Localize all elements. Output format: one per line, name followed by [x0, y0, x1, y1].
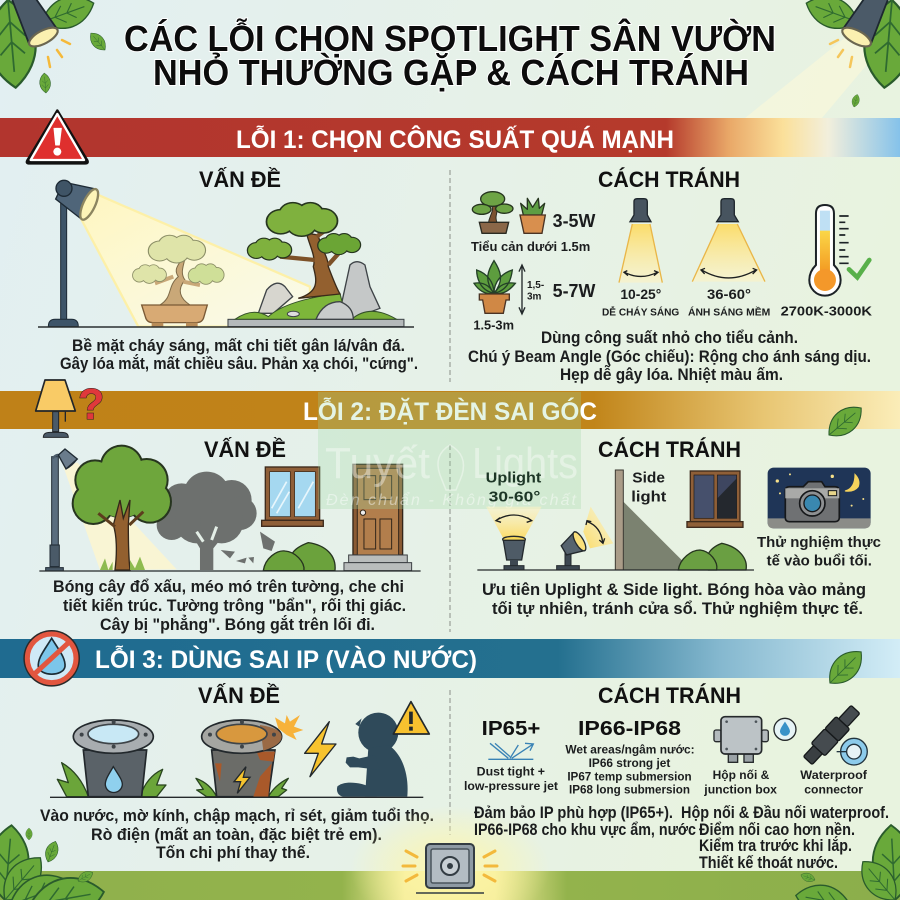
text: cach tranh 1: Chú ý Beam Angle (Góc chiếu): Rộng cho ánh sáng dịu. [468, 348, 871, 366]
text: junction box label: Hộp nối & [713, 768, 770, 782]
text: cach tranh 3: Thiết kế thoát nước. [699, 854, 838, 872]
text: height label: 1,5- [527, 280, 544, 291]
text: color temperature: 2700K-3000K [781, 303, 872, 318]
text: test at night: Thử nghiệm thực [757, 535, 881, 551]
icon: table lamp with question mark [36, 380, 104, 437]
text: van de 2: Bóng cây đổ xấu, méo mó trên tường, che chi [53, 578, 404, 596]
illustration: bad tree shadow [39, 445, 421, 571]
bottom left leaves [0, 824, 107, 900]
washed out bonsai in pot [133, 236, 224, 327]
text: test at night: tế vào buổi tối. [767, 553, 872, 569]
icon: bottom safe with glow [350, 806, 550, 900]
watermark: Tuyết [325, 439, 430, 488]
top right corner decoration [745, 0, 900, 118]
narrow beam lamp [619, 199, 662, 283]
text: anh sang mem: ÁNH SÁNG MỀM [688, 305, 770, 318]
watermark: Đèn chuẩn - Không giả chất [326, 491, 577, 509]
text: connector label: Waterproof [800, 768, 868, 782]
text: 3-5W: 3-5W [553, 210, 596, 231]
text: dust tight [464, 765, 558, 793]
grass tufts [100, 557, 145, 570]
green tree [72, 445, 172, 570]
banner: loi 2: LỖI 2: ĐẶT ĐÈN SAI GÓC [303, 396, 597, 426]
text: van de 3: Rò điện (mất an toàn, đặc biệt trẻ em). [91, 826, 382, 844]
text: question mark: ? [78, 381, 104, 429]
text: connector label: connector [804, 782, 863, 796]
gray shadow tree [157, 472, 275, 570]
rusted damaged lamp [202, 715, 303, 797]
text: connector label [800, 768, 868, 796]
illustration: overlit bonsai [48, 175, 404, 327]
icon: garden lamp post [46, 449, 77, 571]
text: van de 3: Tốn chi phí thay thế. [156, 844, 310, 862]
text: van de 2 [53, 578, 406, 634]
icon: leaf on banner 2 [822, 399, 868, 444]
icon: waterproof connector [801, 703, 867, 767]
text: cach tranh 2: tối tự nhiên, tránh cửa sổ. Thử nghiệm thực tế. [492, 600, 863, 618]
text: 10-25: 10-25° [620, 286, 661, 302]
text: van de 1: Gây lóa mắt, mất chiều sâu. Phản xạ chói, "cứng". [60, 354, 418, 373]
bottom grass strip [0, 871, 900, 900]
text: uplight label: 30-60° [489, 489, 540, 506]
text: IP66-IP68: IP66-IP68 [578, 717, 681, 740]
icon: warning sign [393, 702, 429, 734]
text: van de 1 [60, 337, 418, 373]
text: wet area list: Wet areas/ngâm nước: [565, 742, 695, 756]
text: cach tranh 3: Đảm bảo IP phù hợp (IP65+). [474, 804, 673, 822]
good in-ground lamp [73, 720, 153, 797]
icon: child silhouette [337, 713, 408, 797]
beam angle comparison [602, 199, 770, 318]
text: de chay sang: DỄ CHÁY SÁNG [602, 305, 679, 318]
text: side light label: Side [632, 469, 665, 486]
text: 5-7W: 5-7W [553, 280, 596, 301]
text: cach tranh 3: IP66-IP68 cho khu vực ẩm, nước [474, 821, 696, 839]
ground line 1 [38, 326, 414, 328]
icon: leaf on banner 3 [822, 643, 870, 691]
text: cach tranh 2 [482, 581, 866, 618]
window [262, 467, 323, 526]
icon: height arrow [519, 265, 525, 314]
text: dust tight: Dust tight + [477, 765, 545, 779]
icon: top left light rays [48, 40, 70, 67]
title [124, 17, 776, 93]
watermark [318, 392, 581, 509]
banner: loi 1 [0, 118, 900, 157]
text: van de 3 [40, 807, 434, 862]
text: wet area list: IP66 strong jet [589, 756, 670, 770]
side spot fixture [557, 507, 613, 570]
text: side light label [631, 469, 666, 506]
bottom right leaves [793, 824, 900, 900]
icon: camera at night [768, 468, 871, 528]
text: junction box label: junction box [703, 782, 777, 796]
text: cach tranh 1 [468, 329, 871, 384]
wide beam lamp [692, 199, 765, 282]
banner: loi 3: LỖI 3: DÙNG SAI IP (VÀO NƯỚC) [95, 644, 477, 674]
text: cach tranh 3: Kiểm tra trước khi lắp. [699, 836, 852, 855]
text: height label: 3m [527, 291, 542, 302]
heading: cach tranh 2: CÁCH TRÁNH [598, 437, 741, 462]
heading: van de 3: VẤN ĐỀ [198, 683, 280, 708]
text: cach tranh 2: Ưu tiên Uplight & Side light. Bóng hòa vào mảng [482, 581, 866, 599]
text: van de 2: Cây bị "phẳng". Bóng gắt trên lối đi. [100, 615, 375, 634]
rock garden with bonsai [228, 203, 404, 327]
illustration: uplight and side light [477, 468, 881, 570]
icon: succulent pot [520, 198, 545, 233]
top left corner decoration [0, 0, 110, 93]
text: 36-60: 36-60° [707, 286, 751, 302]
icon: warning triangle [27, 111, 88, 163]
text: dust tight: low-pressure jet [464, 779, 558, 793]
heading: van de 1: VẤN ĐỀ [199, 167, 281, 192]
text: cach tranh 1: Hẹp dễ gây lóa. Nhiệt màu ấm. [560, 365, 783, 384]
heading: cach tranh 1: CÁCH TRÁNH [598, 167, 740, 192]
heading: cach tranh 3: CÁCH TRÁNH [598, 683, 741, 708]
text: test at night [757, 535, 881, 569]
wattage guide [471, 192, 596, 333]
icon: top left spotlight [4, 0, 60, 50]
grass around lamps [57, 763, 288, 797]
icon: junction box [714, 717, 796, 762]
door with steps [344, 464, 412, 571]
uplight fixture [486, 507, 542, 570]
light beam [82, 195, 310, 327]
text: cach tranh 1: Dùng công suất nhỏ cho tiểu cảnh. [541, 329, 798, 347]
icon: no water [23, 630, 80, 687]
divider lines [449, 170, 451, 835]
text: van de 3: Vào nước, mờ kính, chập mạch, rỉ sét, giảm tuổi thọ. [40, 807, 434, 825]
text: uplight label [486, 469, 541, 506]
text: height label [527, 280, 544, 302]
text: wet area list: IP67 temp submersion [567, 769, 692, 783]
dark window [687, 471, 743, 527]
heading: van de 2: VẤN ĐỀ [204, 437, 286, 462]
text: wet area list [565, 742, 695, 797]
illustration: water damage [50, 702, 429, 797]
text: 1.5-3m: 1.5-3m [473, 319, 514, 333]
icon: top right spotlight [840, 0, 896, 50]
bush [263, 543, 335, 571]
text: van de 1: Bề mặt cháy sáng, mất chi tiết gân lá/vân đá. [72, 337, 405, 355]
text: side light label: light [631, 489, 666, 506]
icon: thermometer with check [781, 205, 872, 318]
title: NHỎ THƯỜNG GẶP & CÁCH TRÁNH [153, 51, 749, 93]
text: IP65: IP65+ [482, 717, 540, 740]
text: tieu canh: Tiểu cản dưới 1.5m [471, 240, 590, 254]
icon: dust and jet arrows [488, 743, 533, 759]
text: wet area list: IP68 long submersion [569, 783, 690, 797]
bush [678, 543, 746, 570]
watermark: Lights [472, 439, 578, 488]
wall and shadow [615, 470, 683, 570]
icon: lamp on pole [48, 175, 102, 327]
text: junction box label [703, 768, 777, 796]
title: CÁC LỖI CHỌN SPOTLIGHT SÂN VƯỜN [124, 17, 776, 59]
icon: small bonsai [472, 192, 513, 233]
panel: ip ratings [464, 703, 868, 797]
icon: lightning bolt [305, 722, 336, 777]
banner: loi 3 [0, 639, 900, 678]
icon: leafy plant [474, 261, 515, 313]
text: cach tranh 3 [474, 804, 889, 872]
light beam [63, 462, 177, 570]
banner: loi 2 [0, 391, 900, 429]
text: cach tranh 3: Điểm nối cao hơn nền. [699, 821, 855, 839]
icon: top right light rays [830, 40, 852, 67]
text: van de 2: tiết kiến trúc. Tường trông "bẩn", rối thị giác. [63, 597, 406, 615]
banner: loi 1: LỖI 1: CHỌN CÔNG SUẤT QUÁ MẠNH [236, 124, 674, 154]
text: uplight label: Uplight [486, 469, 541, 486]
